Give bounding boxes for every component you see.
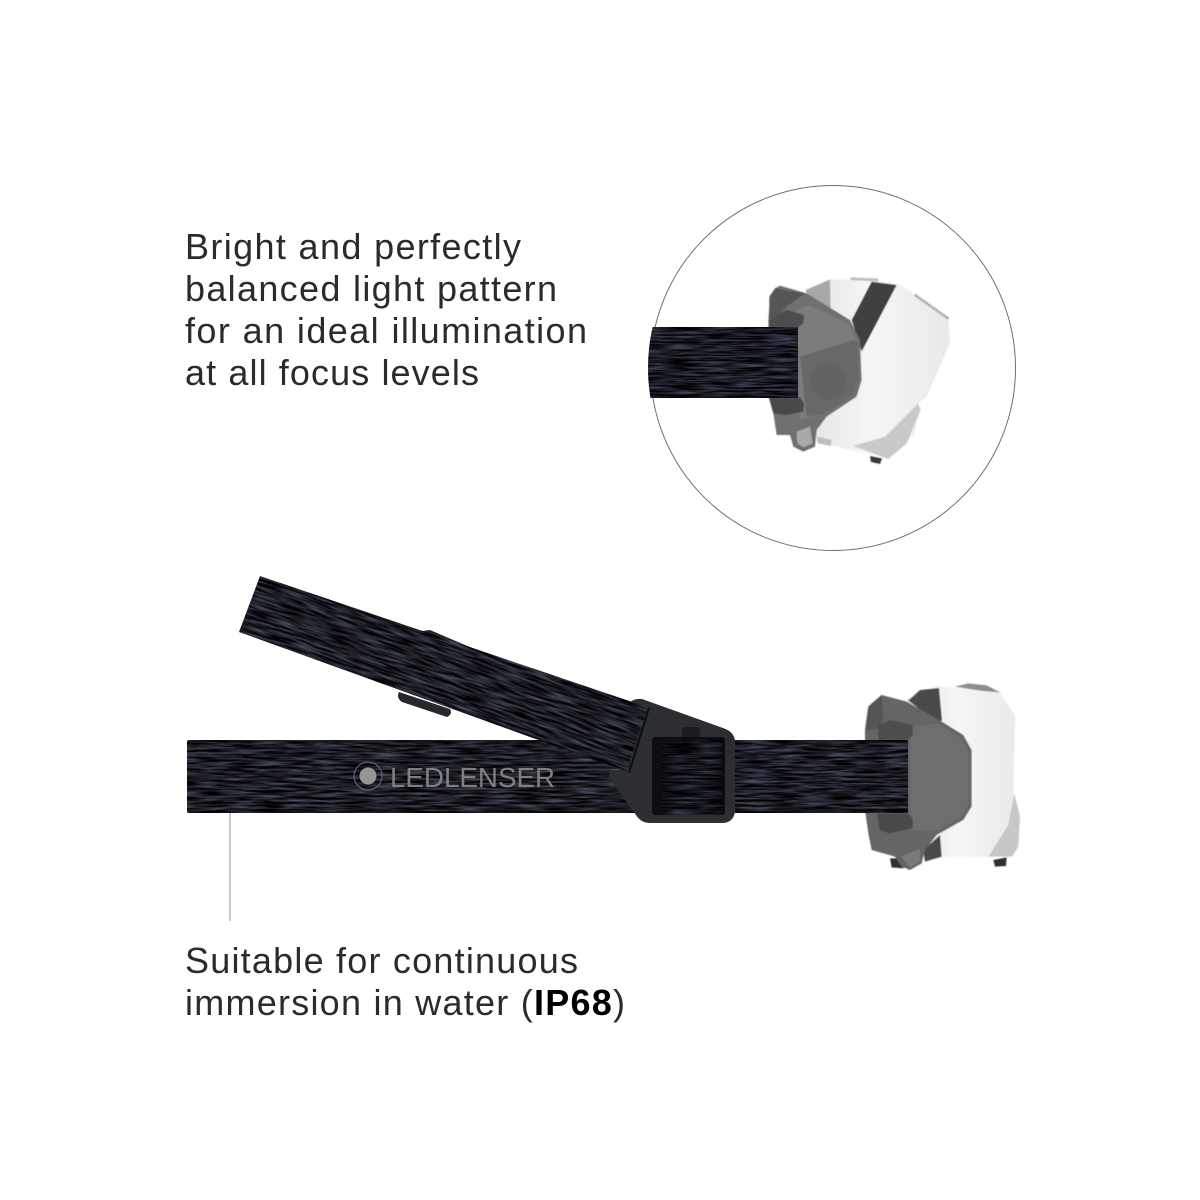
text: light pattern description: at all focus levels xyxy=(185,352,479,393)
logo: LEDLENSER: LEDLENSER xyxy=(390,762,555,793)
lower strap xyxy=(187,740,908,813)
text: light pattern description: balanced light pattern xyxy=(185,268,557,309)
text: light pattern description: Bright and perfectly xyxy=(185,226,521,267)
headband xyxy=(187,576,908,823)
text: IP68 description: Suitable for continuous xyxy=(185,940,578,981)
headlamp body side view xyxy=(865,683,1020,870)
upper strap xyxy=(239,576,650,773)
detail circle: headlamp close-up xyxy=(640,186,1016,550)
buckle xyxy=(609,699,735,823)
text: light pattern description: for an ideal illumination xyxy=(185,310,587,351)
infographic canvas xyxy=(186,185,1020,1022)
leader line xyxy=(229,813,231,921)
headlamp body close-up xyxy=(768,279,950,464)
strap slider lower loop xyxy=(398,692,451,717)
lamp housing xyxy=(865,683,1020,870)
text: light pattern description xyxy=(185,226,587,393)
head strap close-up xyxy=(640,327,798,398)
text: IP68 description xyxy=(185,940,625,1023)
text: IP68 description: immersion in water (IP68) xyxy=(185,982,625,1023)
strap slider upper bump xyxy=(420,630,472,660)
